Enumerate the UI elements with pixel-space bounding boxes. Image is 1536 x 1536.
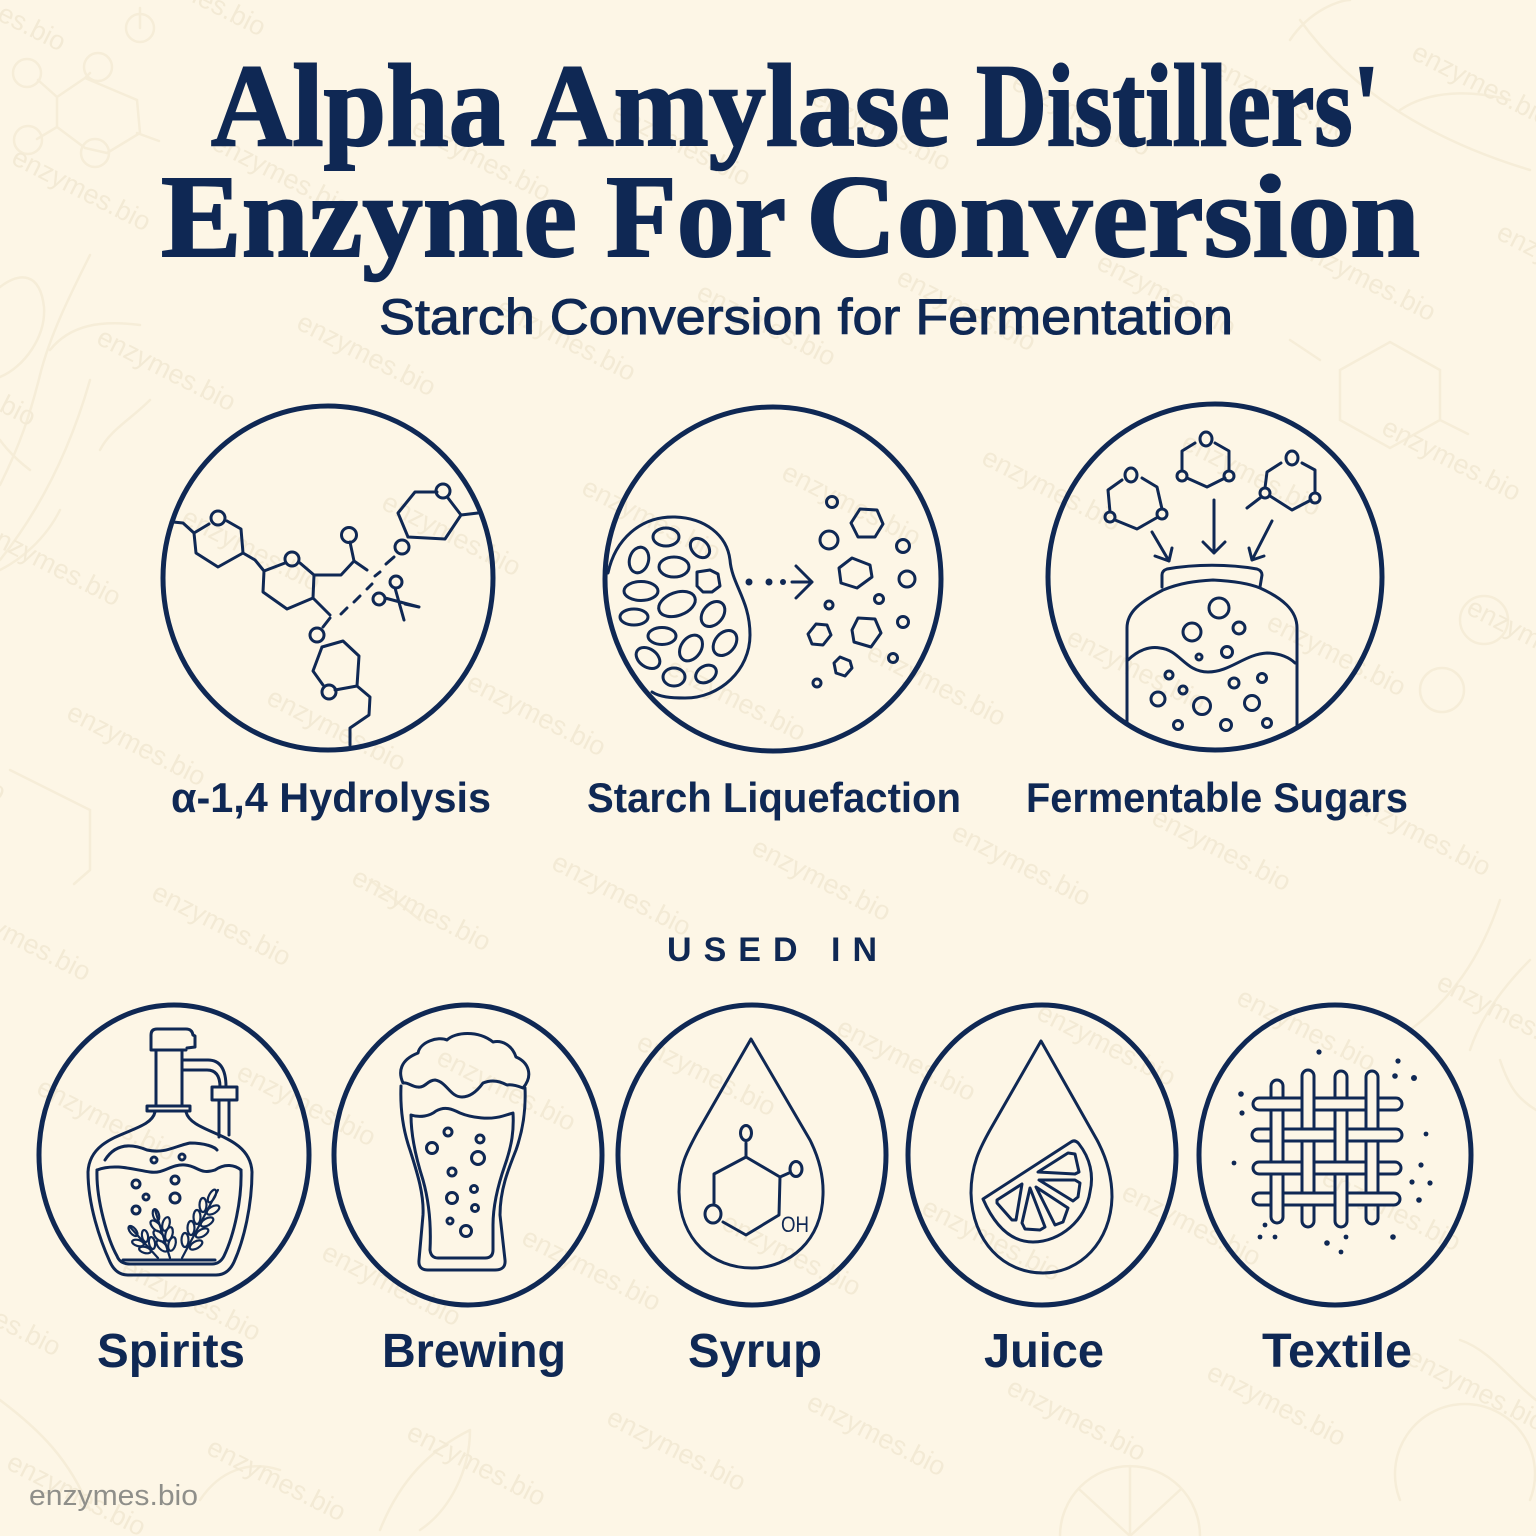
text: enzymes.bio <box>717 1207 866 1302</box>
icon: drop with citrus <box>908 1005 1176 1305</box>
title: For <box>606 151 786 282</box>
label: Brewing <box>382 1325 566 1378</box>
text: enzymes.bio <box>1177 427 1326 522</box>
text: enzymes.bio <box>517 1222 666 1317</box>
icon: starch chain with scissors <box>163 406 493 750</box>
panel: hydrolysis <box>163 406 493 821</box>
text: enzymes.bio <box>432 1042 581 1137</box>
text: enzymes.bio <box>402 1417 551 1512</box>
icon: drop with molecule <box>618 1005 886 1305</box>
label: Syrup <box>688 1325 822 1378</box>
icon: drop with molecule: OH <box>781 1212 809 1237</box>
text: enzymes.bio <box>207 127 356 222</box>
panel: spirits <box>39 1005 309 1378</box>
text: enzymes.bio <box>602 1402 751 1497</box>
panel: liquefaction <box>587 407 961 821</box>
title <box>161 40 1420 282</box>
text: enzymes.bio <box>1202 1357 1351 1452</box>
title: Alpha <box>211 40 505 171</box>
text: enzymes.bio <box>377 487 526 582</box>
panel: syrup <box>618 1005 886 1378</box>
icon: sugars entering fermenter <box>1048 404 1382 750</box>
text: enzymes.bio <box>177 502 326 597</box>
text: enzymes.bio <box>1317 1162 1466 1257</box>
text: enzymes.bio <box>917 1192 1066 1287</box>
title: Distillers' <box>976 40 1380 171</box>
text: enzymes.bio <box>262 682 411 777</box>
text: enzymes.bio <box>977 442 1126 537</box>
text: enzymes.bio <box>632 1027 781 1122</box>
text: enzymes.bio <box>807 82 956 177</box>
title: Amylase <box>531 40 950 171</box>
icon: starch granule to fragments <box>605 407 941 751</box>
panel: brewing <box>334 1005 602 1378</box>
text: enzymes.bio <box>777 457 926 552</box>
text: enzymes.bio <box>692 277 841 372</box>
text: enzymes.bio <box>1032 997 1181 1092</box>
text: enzymes.bio <box>317 1237 466 1332</box>
text: enzymes.bio <box>202 1432 351 1527</box>
text: enzymes.bio <box>747 832 896 927</box>
text: enzymes.bio <box>547 847 696 942</box>
panel: juice <box>908 1005 1176 1378</box>
text: enzymes.bio <box>802 1387 951 1482</box>
title: Enzyme <box>161 151 577 282</box>
text: enzymes.bio <box>292 307 441 402</box>
watermark: enzymes.bio <box>29 1480 198 1512</box>
subtitle: Starch Conversion for Fermentation <box>379 289 1233 345</box>
label: Fermentable Sugars <box>1026 774 1408 821</box>
text: enzymes.bio <box>92 322 241 417</box>
text: enzymes.bio <box>607 97 756 192</box>
text: enzymes.bio <box>1002 1372 1151 1467</box>
text: enzymes.bio <box>1062 622 1211 717</box>
text: enzymes.bio <box>232 1057 381 1152</box>
text: enzymes.bio <box>947 817 1096 912</box>
icon: woven fabric <box>1199 1005 1471 1305</box>
text: enzymes.bio <box>1007 67 1156 162</box>
text: enzymes.bio <box>577 472 726 567</box>
text: enzymes.bio <box>462 667 611 762</box>
label: Spirits <box>97 1325 245 1378</box>
text: enzymes.bio <box>62 697 211 792</box>
label: α-1,4 Hydrolysis <box>171 774 491 821</box>
text: enzymes.bio <box>892 262 1041 357</box>
text: enzymes.bio <box>1377 412 1526 507</box>
text: enzymes.bio <box>1292 232 1441 327</box>
panel: sugars <box>1026 404 1408 821</box>
text: enzymes.bio <box>1117 1177 1266 1272</box>
label: Starch Liquefaction <box>587 774 961 821</box>
icon: bottle with grain <box>39 1005 309 1305</box>
text: enzymes.bio <box>832 1012 981 1107</box>
icon: beer glass <box>334 1005 602 1305</box>
text: enzymes.bio <box>147 877 296 972</box>
text: enzymes.bio <box>662 652 811 747</box>
heading: used in: USED IN <box>667 931 877 969</box>
text: enzymes.bio <box>1232 982 1381 1077</box>
panel: textile <box>1199 1005 1471 1378</box>
text: enzymes.bio <box>7 142 156 237</box>
text: enzymes.bio <box>1262 607 1411 702</box>
text: enzymes.bio <box>862 637 1011 732</box>
text: enzymes.bio <box>1092 247 1241 342</box>
text: enzymes.bio <box>407 112 556 207</box>
title: Conversion <box>806 151 1420 282</box>
text: enzymes.bio <box>117 1252 266 1347</box>
text: enzymes.bio <box>1347 787 1496 882</box>
label: Textile <box>1262 1325 1412 1378</box>
text: enzymes.bio <box>32 1072 181 1167</box>
text: enzymes.bio <box>1207 52 1356 147</box>
text: enzymes.bio <box>492 292 641 387</box>
label: Juice <box>984 1325 1104 1378</box>
text: enzymes.bio <box>347 862 496 957</box>
text: enzymes.bio <box>1147 802 1296 897</box>
